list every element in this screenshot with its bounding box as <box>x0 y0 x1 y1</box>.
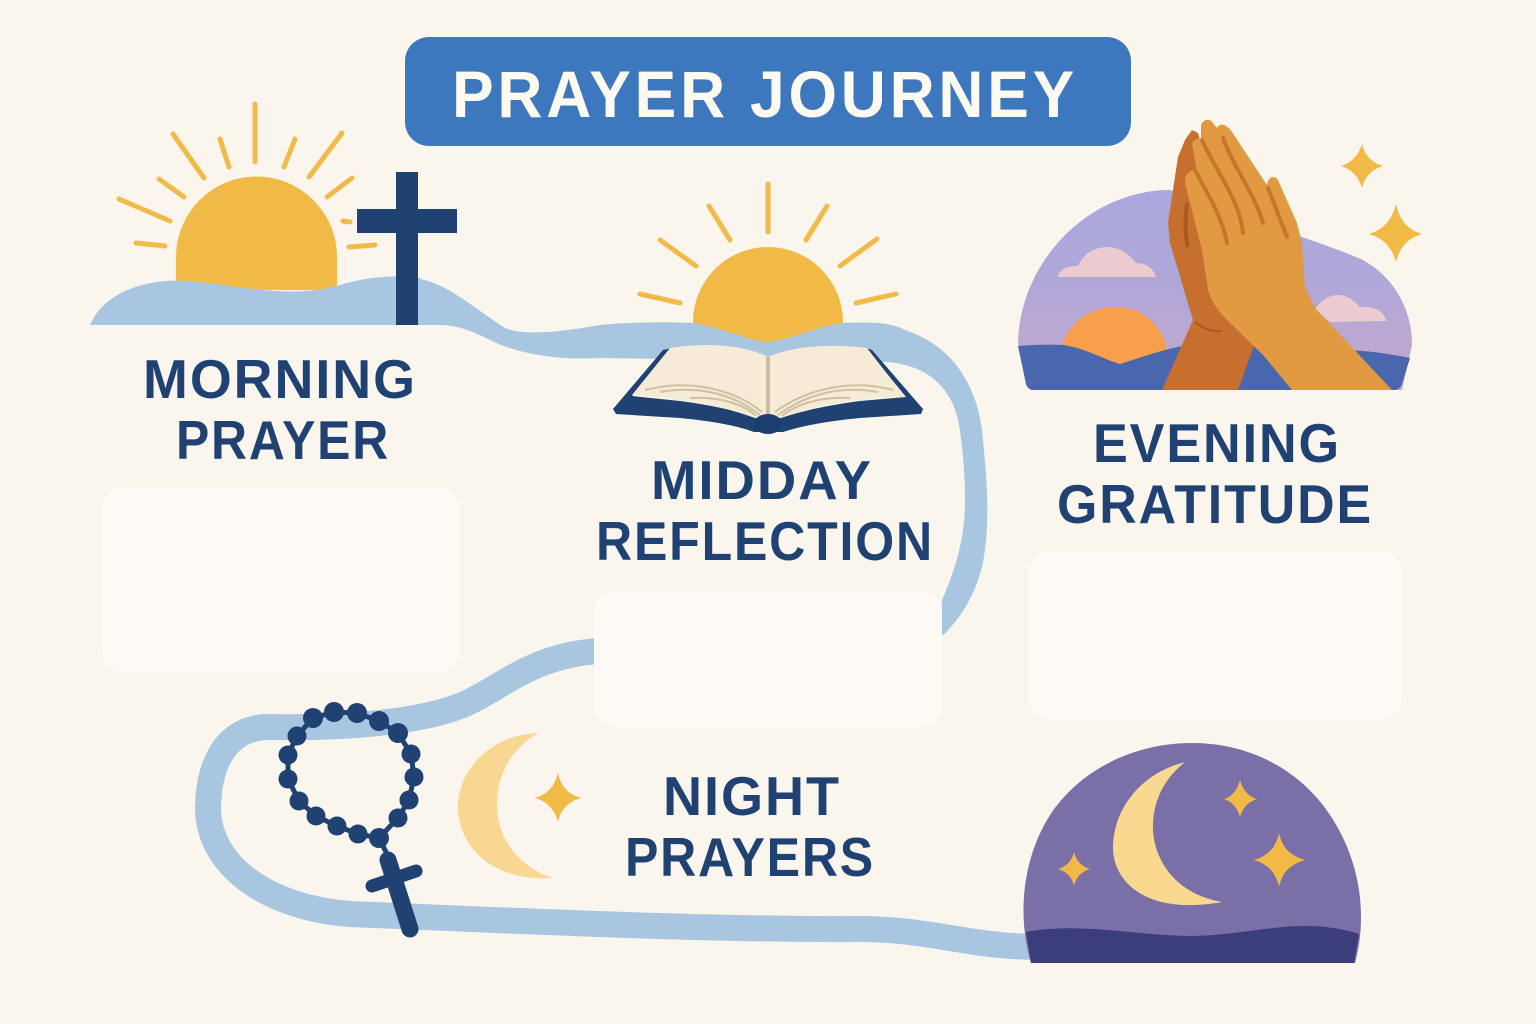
heading: midday reflection: MIDDAY <box>651 449 873 511</box>
title banner: PRAYER JOURNEY <box>452 57 1078 131</box>
icon: rosary <box>278 702 424 929</box>
heading: morning prayer: MORNING <box>143 348 417 410</box>
icon: evening scene with praying hands <box>1018 120 1412 390</box>
icon: small crescent and star <box>458 733 581 878</box>
heading: midday reflection <box>596 449 934 572</box>
heading: night prayers: NIGHT <box>663 765 841 827</box>
heading: evening gratitude: GRATITUDE <box>1057 473 1373 535</box>
panel: evening gratitude card <box>1029 551 1402 719</box>
heading: morning prayer <box>143 348 417 471</box>
heading: night prayers: PRAYERS <box>625 826 875 888</box>
heading: evening gratitude <box>1057 412 1373 535</box>
heading: morning prayer: PRAYER <box>176 409 390 471</box>
title banner <box>405 37 1131 146</box>
journey path <box>208 278 1040 947</box>
icon: evening sparkles <box>1341 144 1422 262</box>
icon: midday sun <box>640 184 896 345</box>
heading: midday reflection: REFLECTION <box>596 510 934 572</box>
icon: night dome with moon and stars <box>1023 743 1361 963</box>
panel: midday reflection card <box>594 591 942 727</box>
panel: morning prayer card <box>102 487 459 672</box>
heading: evening gratitude: EVENING <box>1093 412 1341 474</box>
heading: night prayers <box>625 765 875 888</box>
icon: open book <box>613 345 923 434</box>
icon: morning sun, hill and cross <box>90 104 457 325</box>
